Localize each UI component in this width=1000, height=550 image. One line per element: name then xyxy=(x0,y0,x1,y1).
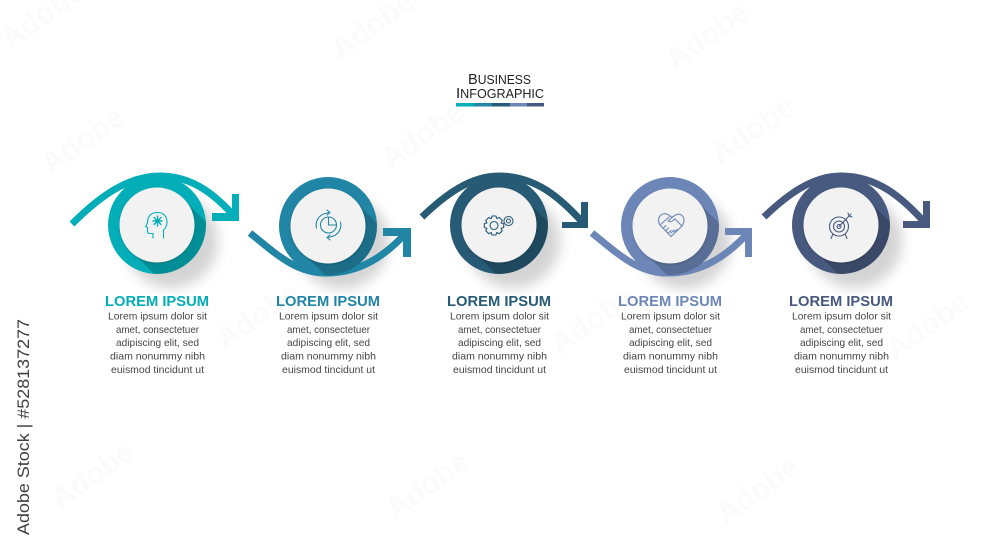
step 2 ring inner shadow xyxy=(308,206,377,275)
step 5 white disc xyxy=(804,188,878,262)
step 3 text: Lorem ipsum dolor sit xyxy=(450,310,549,322)
step 3 ring xyxy=(450,176,548,274)
step 5 text: LOREM IPSUM xyxy=(789,293,893,310)
step 4 text: amet, consectetuer xyxy=(629,324,712,336)
step 5 graphic xyxy=(764,176,930,311)
step 2 text: Lorem ipsum dolor sit xyxy=(279,310,378,322)
step 5 text: amet, consectetuer xyxy=(800,324,883,336)
title: INFOGRAPHIC xyxy=(456,85,544,102)
title: BUSINESS xyxy=(468,71,531,88)
watermark: Adobe xyxy=(45,435,140,516)
icon: target with arrow xyxy=(830,213,852,238)
step 3 ring inner shadow xyxy=(478,205,548,274)
step 1 soft shadow xyxy=(124,194,218,288)
icon: clock with cycle arrows xyxy=(316,210,341,240)
watermark: Adobe xyxy=(705,90,800,171)
step 4 text: Lorem ipsum dolor sit xyxy=(621,310,720,322)
step 1 text xyxy=(105,293,209,376)
step 2 text: diam nonummy nibh xyxy=(281,350,376,362)
step 2 soft shadow xyxy=(295,195,389,289)
watermark: Adobe xyxy=(545,280,640,361)
step 2 white disc xyxy=(290,188,366,264)
step 1 text: diam nonummy nibh xyxy=(110,350,205,362)
step 5 ring xyxy=(792,176,890,274)
step 3 text: amet, consectetuer xyxy=(458,324,541,336)
step 4 white disc xyxy=(632,188,708,264)
icon: head with asterisk xyxy=(146,212,167,238)
step 5 ring inner shadow xyxy=(820,204,890,274)
watermark: Adobe xyxy=(710,450,805,531)
step 3 text xyxy=(447,293,551,376)
step 4 graphic xyxy=(590,177,752,294)
watermark: Adobe xyxy=(375,95,470,176)
step 2 text: adipiscing elit, sed xyxy=(287,337,370,349)
watermark: Adobe xyxy=(380,445,475,526)
step 1 text: LOREM IPSUM xyxy=(105,293,209,310)
step 4 text: LOREM IPSUM xyxy=(618,293,722,310)
step 3 text: euismod tincidunt ut xyxy=(453,364,546,376)
icon: gears xyxy=(484,216,513,235)
step 4 soft shadow xyxy=(637,195,731,289)
step 3 text: adipiscing elit, sed xyxy=(458,337,541,349)
step 5 text: Lorem ipsum dolor sit xyxy=(792,310,891,322)
watermark: Adobe xyxy=(880,285,975,366)
step 1 ring xyxy=(108,176,206,274)
step 1 text: Lorem ipsum dolor sit xyxy=(108,310,207,322)
step 1 graphic xyxy=(70,172,239,292)
step 4 text: diam nonummy nibh xyxy=(623,350,718,362)
step 2 text: LOREM IPSUM xyxy=(276,293,380,310)
title xyxy=(456,71,544,102)
step 4 text xyxy=(618,293,722,376)
watermark: Adobe xyxy=(210,275,305,356)
step 5 text: adipiscing elit, sed xyxy=(800,337,883,349)
step 5 text xyxy=(789,293,893,376)
step 2 text xyxy=(276,293,380,376)
step 1 white disc xyxy=(120,188,194,262)
step 4 text: euismod tincidunt ut xyxy=(624,364,717,376)
step 3 text: diam nonummy nibh xyxy=(452,350,547,362)
step 3 soft shadow xyxy=(466,194,560,288)
step 2 text: amet, consectetuer xyxy=(287,324,370,336)
step 5 soft shadow xyxy=(808,194,902,288)
step 1 arrow xyxy=(72,176,239,224)
title colour bar xyxy=(456,103,544,106)
step 5 arrow xyxy=(764,176,930,228)
step 2 ring xyxy=(279,177,377,275)
stock credit vertical text: Adobe Stock | #528137277 xyxy=(14,319,33,535)
step 2 graphic xyxy=(248,177,411,294)
step 1 text: euismod tincidunt ut xyxy=(111,364,204,376)
step 3 text: LOREM IPSUM xyxy=(447,293,551,310)
step 2 text: euismod tincidunt ut xyxy=(282,364,375,376)
step 5 text: euismod tincidunt ut xyxy=(795,364,888,376)
step 1 text: amet, consectetuer xyxy=(116,324,199,336)
step 4 text: adipiscing elit, sed xyxy=(629,337,712,349)
step 3 graphic xyxy=(422,176,588,311)
step 1 ring inner shadow xyxy=(136,204,206,274)
icon: handshake heart xyxy=(658,214,684,236)
step 3 arrow xyxy=(422,176,588,228)
step 4 arrow xyxy=(592,228,752,273)
step 5 text: diam nonummy nibh xyxy=(794,350,889,362)
step 1 text: adipiscing elit, sed xyxy=(116,337,199,349)
step 4 ring xyxy=(621,177,719,275)
step 4 ring inner shadow xyxy=(649,206,719,275)
step 2 arrow xyxy=(250,228,411,273)
watermark: Adobe xyxy=(35,100,130,181)
step 3 white disc xyxy=(462,188,536,262)
